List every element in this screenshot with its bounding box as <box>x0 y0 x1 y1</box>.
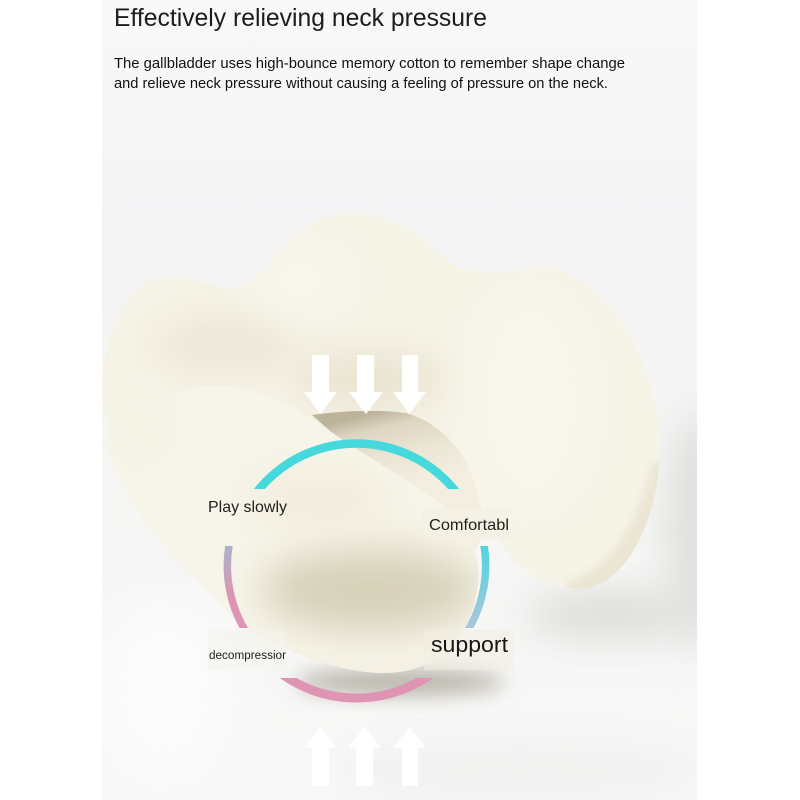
infographic <box>102 8 697 800</box>
description: The gallbladder uses high-bounce memory cotton to remember shape change <box>114 56 625 72</box>
label: decompression: decompressior <box>209 650 286 662</box>
description: and relieve neck pressure without causing a feeling of pressure on the neck. <box>114 76 608 92</box>
arrow down 2 <box>349 355 383 414</box>
label: Comfortabl <box>422 508 509 540</box>
arc: bottom pink <box>280 678 433 702</box>
label: support: support <box>431 632 508 657</box>
label: support <box>424 629 514 670</box>
arc: left blue to pink <box>227 540 248 635</box>
arrow down 3 <box>393 355 426 414</box>
up arrows <box>304 727 426 786</box>
arc: right cyan to blue <box>465 540 486 635</box>
pillow: blend at left edge of lobe <box>93 380 177 470</box>
arc: top cyan <box>254 439 460 489</box>
label: decompression <box>208 630 286 670</box>
arrow up 2 <box>348 727 381 786</box>
pillow: hollow <box>312 411 486 560</box>
title: Effectively relieving neck pressure <box>114 4 487 32</box>
background panel <box>102 0 697 800</box>
arrow up 3 <box>393 727 426 786</box>
down arrows <box>304 355 426 414</box>
description <box>114 56 625 92</box>
ground shadows <box>232 410 697 708</box>
pillow: back body <box>100 200 670 600</box>
pillow illustration <box>93 200 670 685</box>
label: Play slowly: Play slowly <box>208 499 287 516</box>
circular diagram <box>227 442 486 698</box>
label: Comfortabl: Comfortabl <box>429 517 509 534</box>
arrow up 1 <box>304 727 337 786</box>
pillow: front lobe <box>103 431 478 673</box>
arrow down 1 <box>304 355 337 414</box>
